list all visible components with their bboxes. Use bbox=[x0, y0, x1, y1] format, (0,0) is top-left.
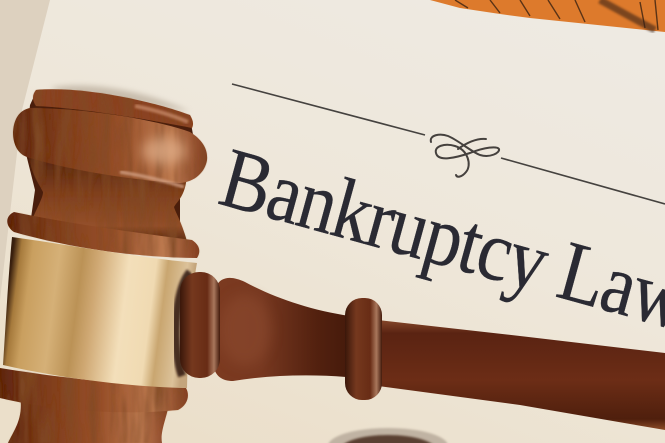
ring highlight bbox=[142, 137, 186, 165]
neck bbox=[28, 150, 188, 245]
shadow where handle meets band bbox=[176, 272, 190, 376]
cap highlight bbox=[135, 106, 188, 122]
decorative rule: right bbox=[501, 158, 665, 204]
top cap bbox=[33, 89, 193, 128]
gavel shadow on paper bbox=[50, 85, 190, 112]
handle collar bbox=[345, 298, 382, 400]
bottom neck bbox=[8, 395, 170, 443]
handle flare bbox=[214, 278, 350, 381]
upper ring bbox=[13, 108, 207, 183]
handle shaft bbox=[378, 320, 665, 430]
gavel head bbox=[0, 89, 207, 443]
neck highlight bbox=[120, 172, 184, 187]
ornament flourish bbox=[431, 135, 499, 177]
brass band bbox=[3, 237, 197, 388]
decorative rule: left bbox=[232, 84, 425, 135]
handle first ring bbox=[180, 272, 220, 378]
dark silhouette behind head parts bbox=[25, 92, 194, 240]
lower ring bbox=[7, 212, 199, 258]
gavel handle bbox=[176, 272, 665, 430]
bottom ring bbox=[0, 368, 188, 412]
orange map corner bbox=[430, 0, 665, 32]
second gavel base at bottom bbox=[328, 428, 448, 443]
